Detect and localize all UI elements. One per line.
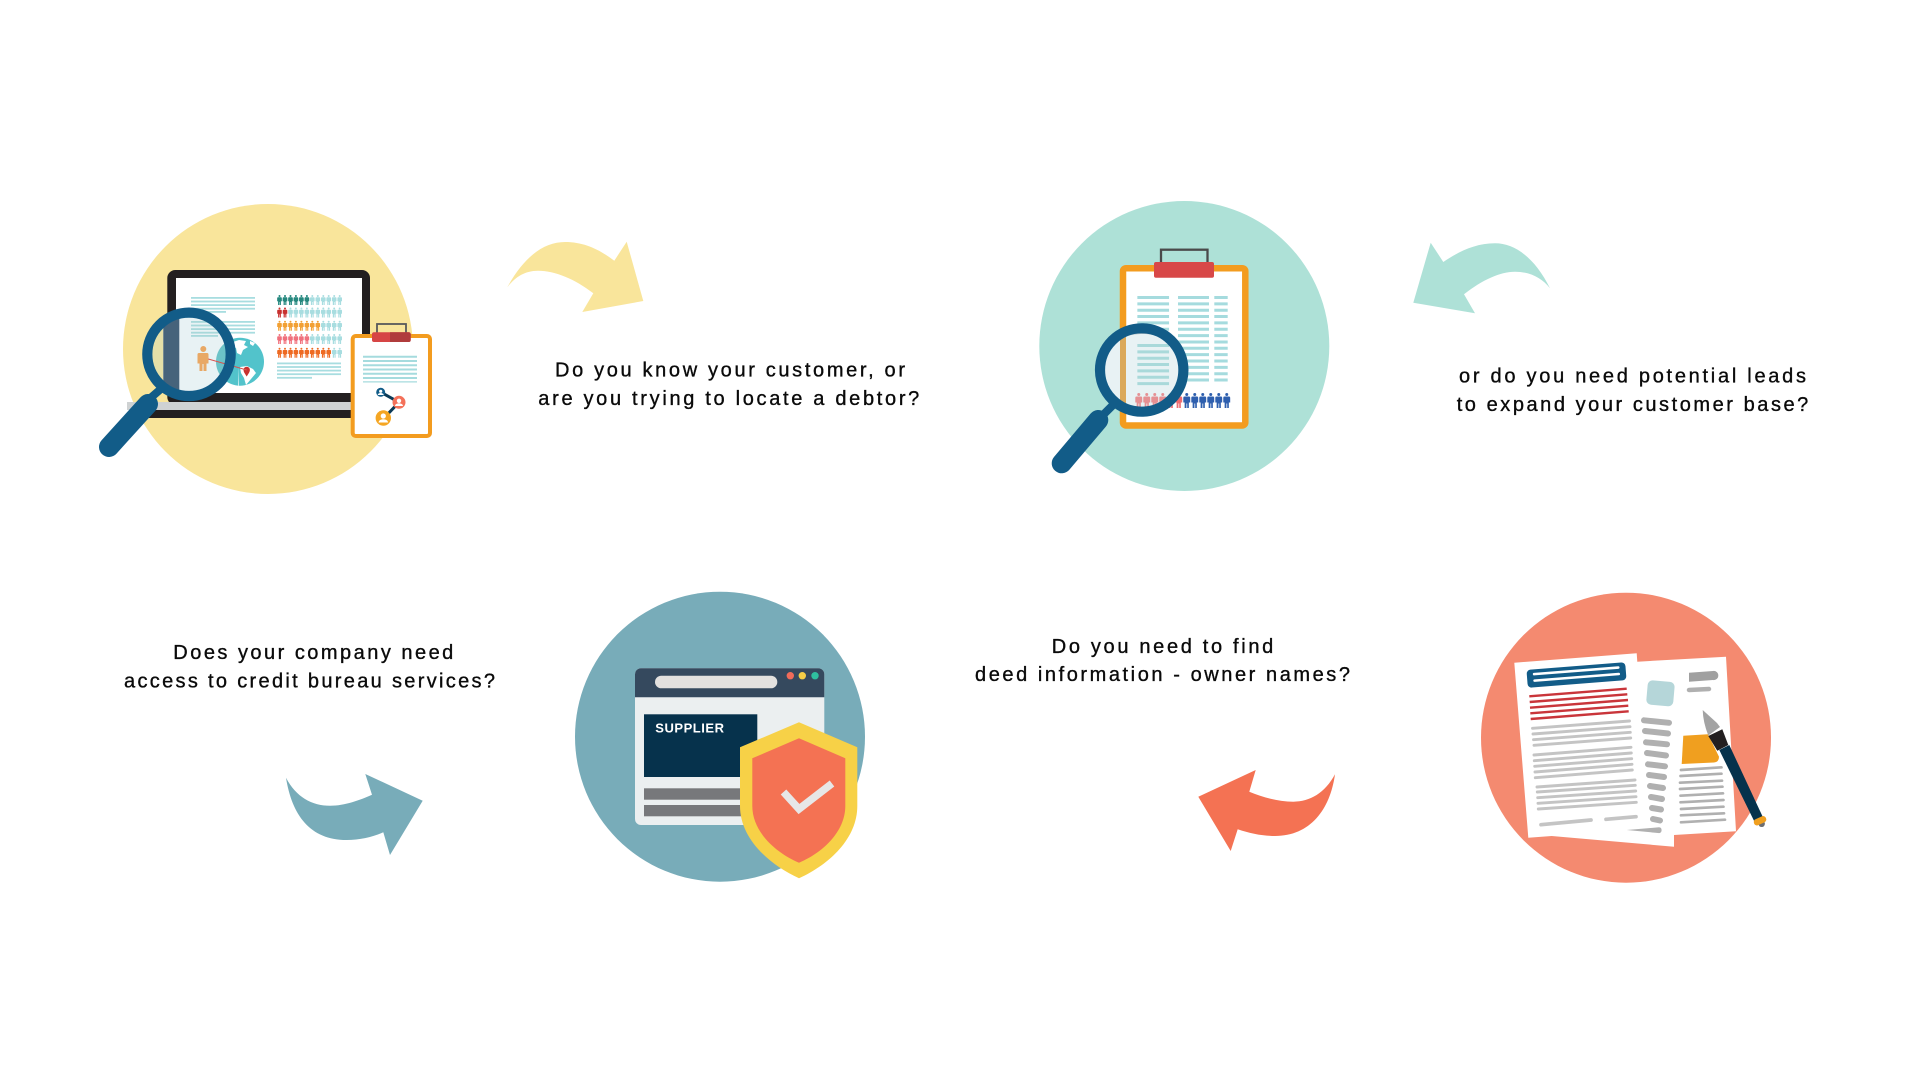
arrow: coral curved left (1198, 770, 1335, 851)
panel: clipboard research illustration (1039, 201, 1329, 491)
signature lines (1541, 817, 1636, 825)
coral circle (1481, 593, 1771, 883)
panel: laptop research illustration (109, 204, 430, 494)
text: potential leads question: or do you need potential leads (1459, 366, 1806, 388)
infographic canvas (99, 201, 1808, 883)
text: locate a debtor question (538, 360, 919, 410)
icon: documents (1514, 653, 1736, 847)
panel: supplier website illustration (575, 592, 865, 882)
people pictogram row (1135, 393, 1230, 408)
label: supplier: SUPPLIER (655, 721, 725, 736)
icon: globe (226, 338, 264, 386)
icon: clipboard (1123, 250, 1245, 426)
icon: person in lens (198, 346, 208, 371)
network nodes (376, 388, 406, 426)
icon: laptop (127, 270, 370, 418)
arrow: blue curved right (286, 774, 423, 855)
icon: location pin (244, 367, 250, 376)
icon: magnifying glass over clipboard (1062, 325, 1185, 463)
text: credit bureau question: access to credit bureau services? (124, 670, 495, 692)
text: potential leads question (1457, 366, 1808, 416)
icon: magnifying glass over laptop (109, 310, 264, 447)
heading pills (1689, 671, 1718, 682)
right column lines (1680, 767, 1725, 822)
arrow: yellow curved right (507, 242, 643, 312)
icon: clipboard with network (353, 324, 430, 436)
text: deed information question: Do you need to find (1052, 636, 1273, 658)
teal picture block (1646, 680, 1675, 707)
middle column lines (1644, 720, 1669, 820)
text: deed information question: deed information - owner names? (975, 664, 1350, 686)
icon: shield with check (740, 722, 857, 878)
document header bar (1526, 662, 1627, 688)
mint circle (1039, 201, 1329, 491)
screen text lines (191, 297, 341, 379)
text: locate a debtor question: are you trying to locate a debtor? (538, 388, 919, 410)
blue circle (575, 592, 865, 882)
text: locate a debtor question: Do you know your customer, or (555, 360, 905, 382)
icon: browser window (635, 668, 824, 825)
red headline lines (1529, 689, 1629, 719)
people pictogram chart (277, 295, 342, 358)
text: credit bureau question: Does your company need (173, 642, 453, 664)
yellow circle (123, 204, 413, 494)
body copy lines (1532, 721, 1636, 809)
text: potential leads question: to expand your customer base? (1457, 394, 1808, 416)
table lines (1153, 296, 1221, 382)
arrow: mint curved left (1413, 243, 1550, 313)
orange picture block (1682, 734, 1719, 764)
text: deed information question (975, 636, 1350, 686)
panel: documents and pen illustration (1481, 593, 1771, 883)
text: credit bureau question (124, 642, 495, 692)
icon: pen (1703, 710, 1767, 827)
